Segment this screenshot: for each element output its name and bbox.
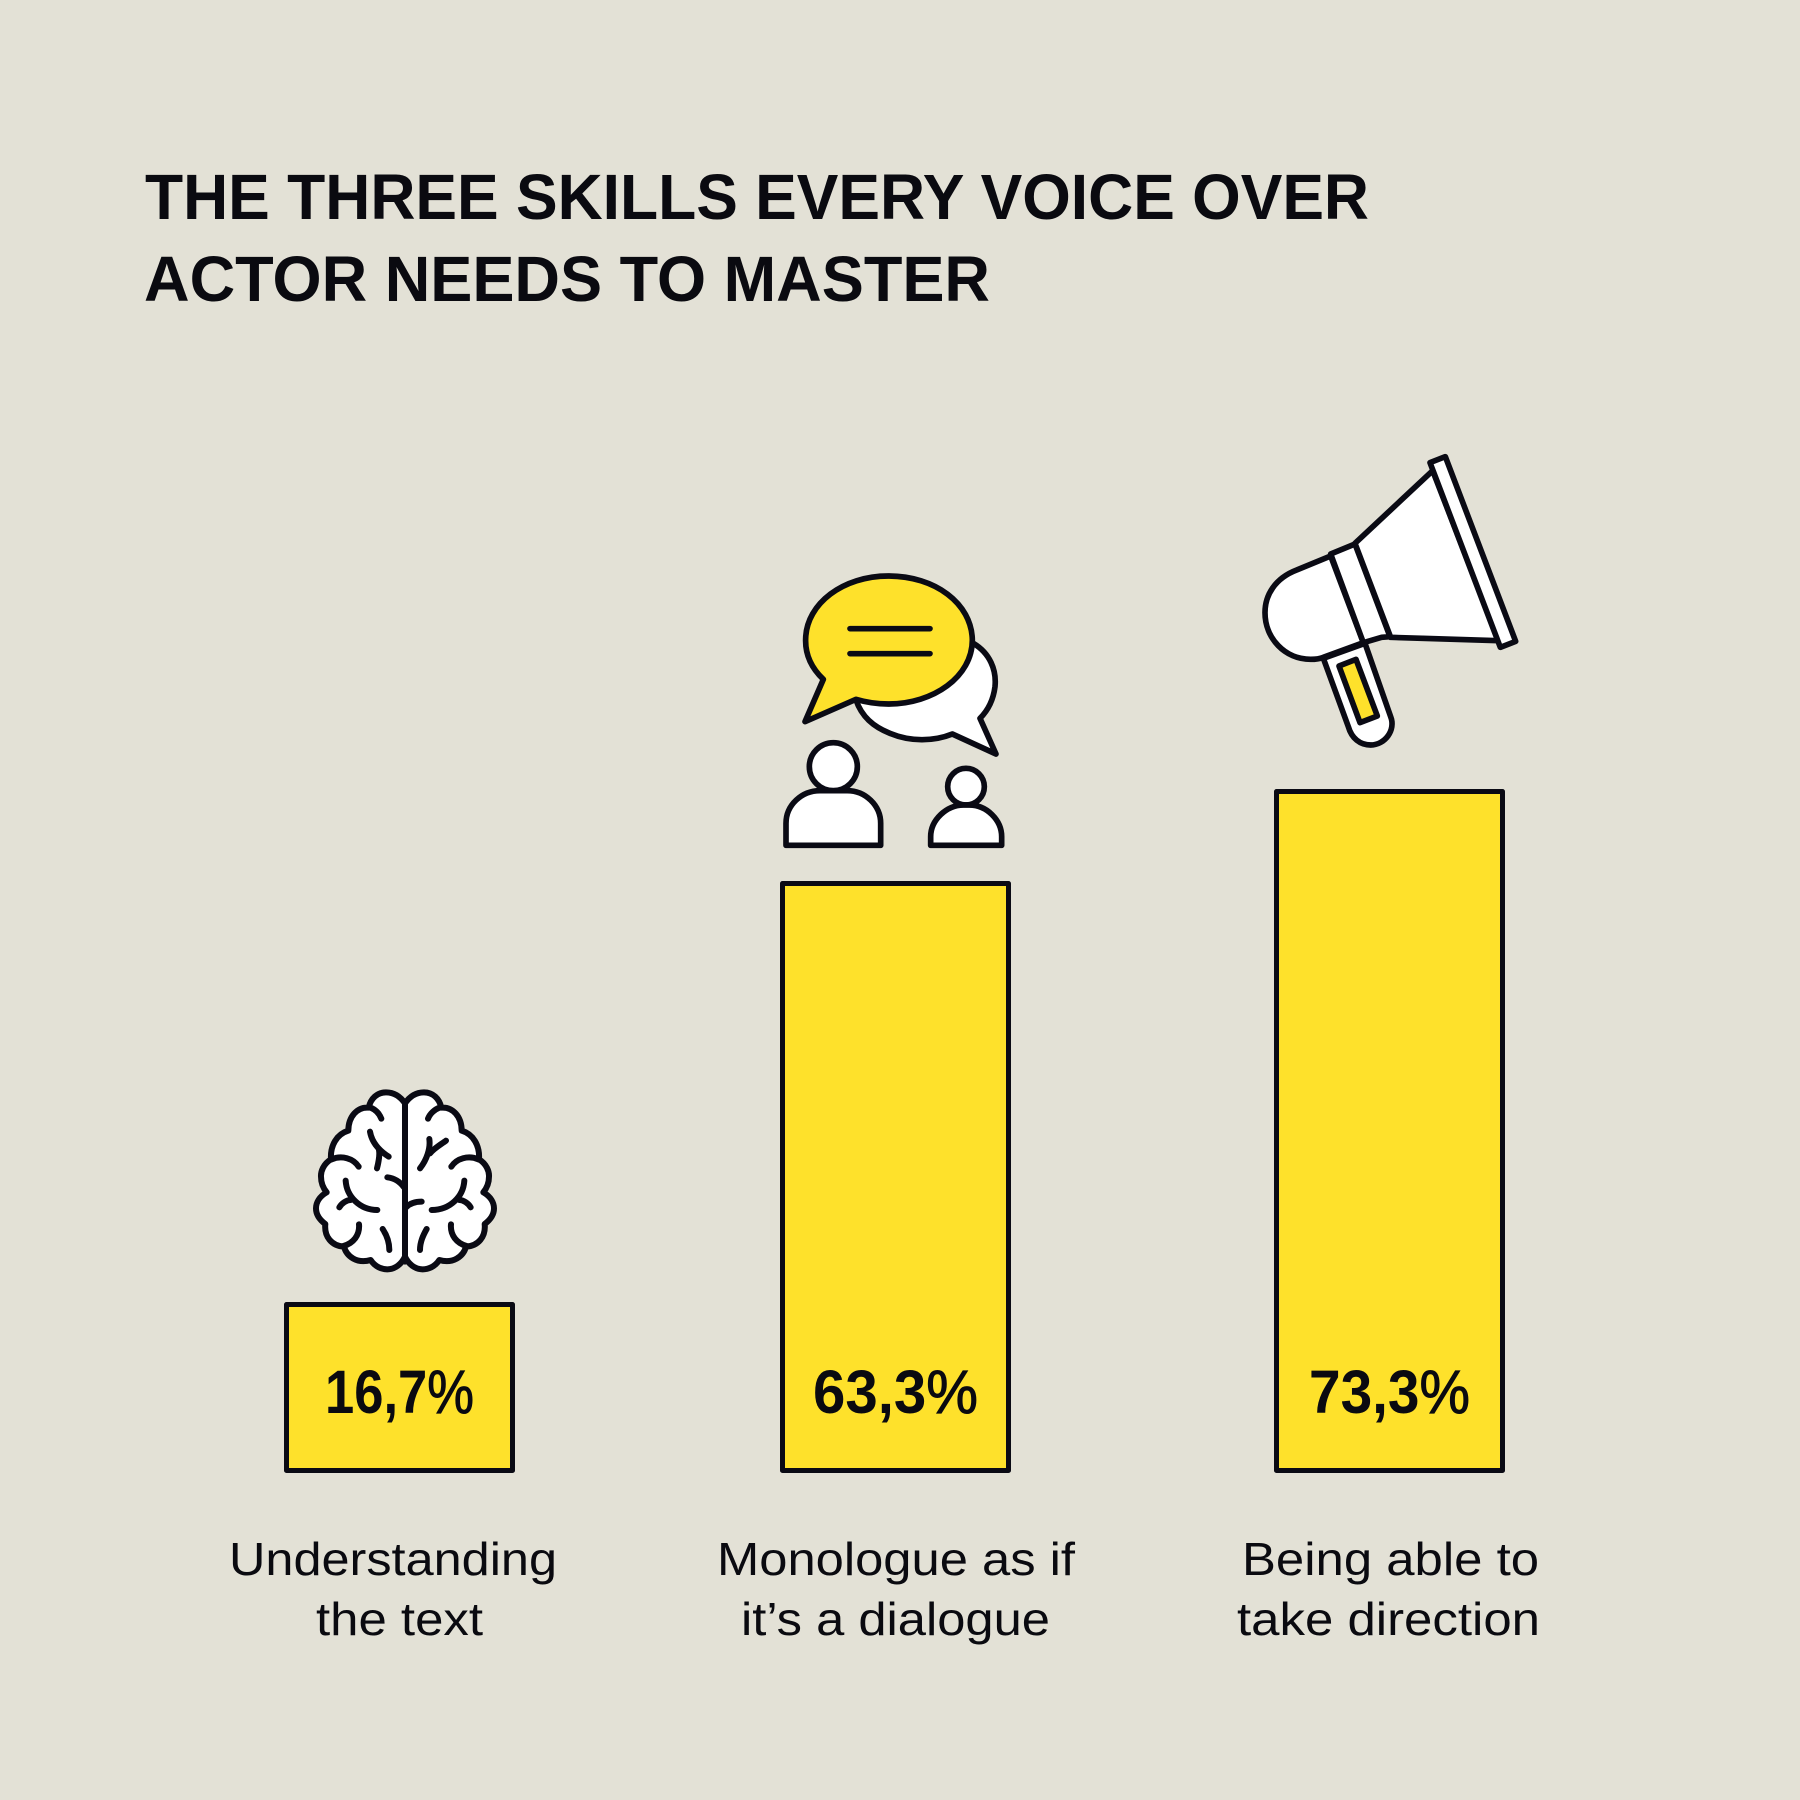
icon: megaphone xyxy=(1265,457,1516,745)
value: 16,7%: 16,7% xyxy=(325,1358,474,1426)
value: 63,3%: 63,3% xyxy=(813,1358,978,1426)
panel: understanding the text xyxy=(229,1092,557,1645)
bar: 73,3% xyxy=(1276,792,1502,1470)
label: being able to take direction xyxy=(1237,1533,1540,1645)
icon: brain xyxy=(316,1092,494,1269)
bar: 16,7% xyxy=(286,1304,512,1470)
label: understanding the text: the text xyxy=(316,1593,483,1645)
label: being able to take direction: take direction xyxy=(1237,1593,1540,1645)
title xyxy=(144,161,1369,315)
panel: monologue as if it's a dialogue xyxy=(717,576,1075,1645)
label: monologue as if it's a dialogue: Monologue as if xyxy=(717,1533,1075,1585)
title: ACTOR NEEDS TO MASTER xyxy=(144,243,990,315)
value: 73,3%: 73,3% xyxy=(1309,1358,1470,1426)
label: understanding the text xyxy=(229,1533,557,1645)
panel: being able to take direction xyxy=(1237,457,1540,1645)
label: understanding the text: Understanding xyxy=(229,1533,557,1585)
icon: speech bubbles and two people xyxy=(786,576,1002,845)
label: being able to take direction: Being able to xyxy=(1242,1533,1539,1585)
label: monologue as if it's a dialogue: it’s a dialogue xyxy=(741,1593,1050,1645)
bar: 63,3% xyxy=(782,884,1008,1470)
title: THE THREE SKILLS EVERY VOICE OVER xyxy=(145,161,1369,233)
label: monologue as if it's a dialogue xyxy=(717,1533,1075,1645)
